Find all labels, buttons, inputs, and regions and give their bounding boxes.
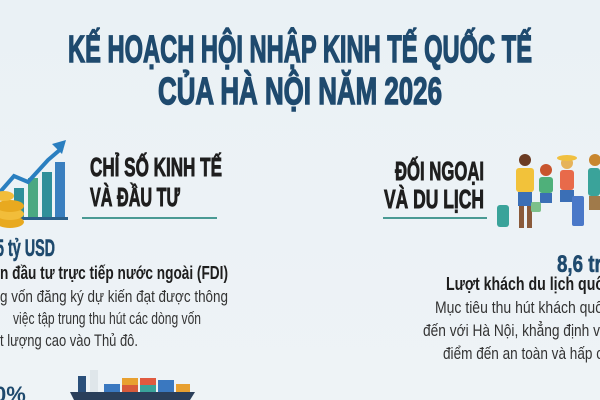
- icon: tourists: [497, 154, 600, 228]
- heading: foreign affairs and tourism: [383, 156, 487, 219]
- icon: cargo ship: [70, 370, 195, 400]
- title: CỦA HÀ NỘI NĂM 2026: [158, 68, 442, 113]
- heading: foreign affairs and tourism: ĐỐI NGOẠI: [395, 156, 484, 186]
- heading: economic indicators: [82, 152, 222, 219]
- stat: FDI: [0, 235, 228, 350]
- stat: FDI: việc tập trung thu hút các dòng vốn: [13, 309, 201, 328]
- stat: FDI: n đầu tư trực tiếp nước ngoài (FDI): [0, 263, 228, 283]
- icon: growth chart with coins: [0, 140, 68, 228]
- heading: economic indicators: VÀ ĐẦU TƯ: [90, 182, 180, 212]
- stat: FDI: t lượng cao vào Thủ đô.: [0, 331, 138, 350]
- stat: FDI: g vốn đăng ký dự kiến đạt được thông: [0, 287, 228, 306]
- stat: international tourists: [423, 251, 600, 363]
- heading: foreign affairs and tourism: VÀ DU LỊCH: [384, 184, 484, 214]
- title: [68, 26, 532, 113]
- heading: economic indicators: CHỈ SỐ KINH TẾ: [90, 152, 222, 182]
